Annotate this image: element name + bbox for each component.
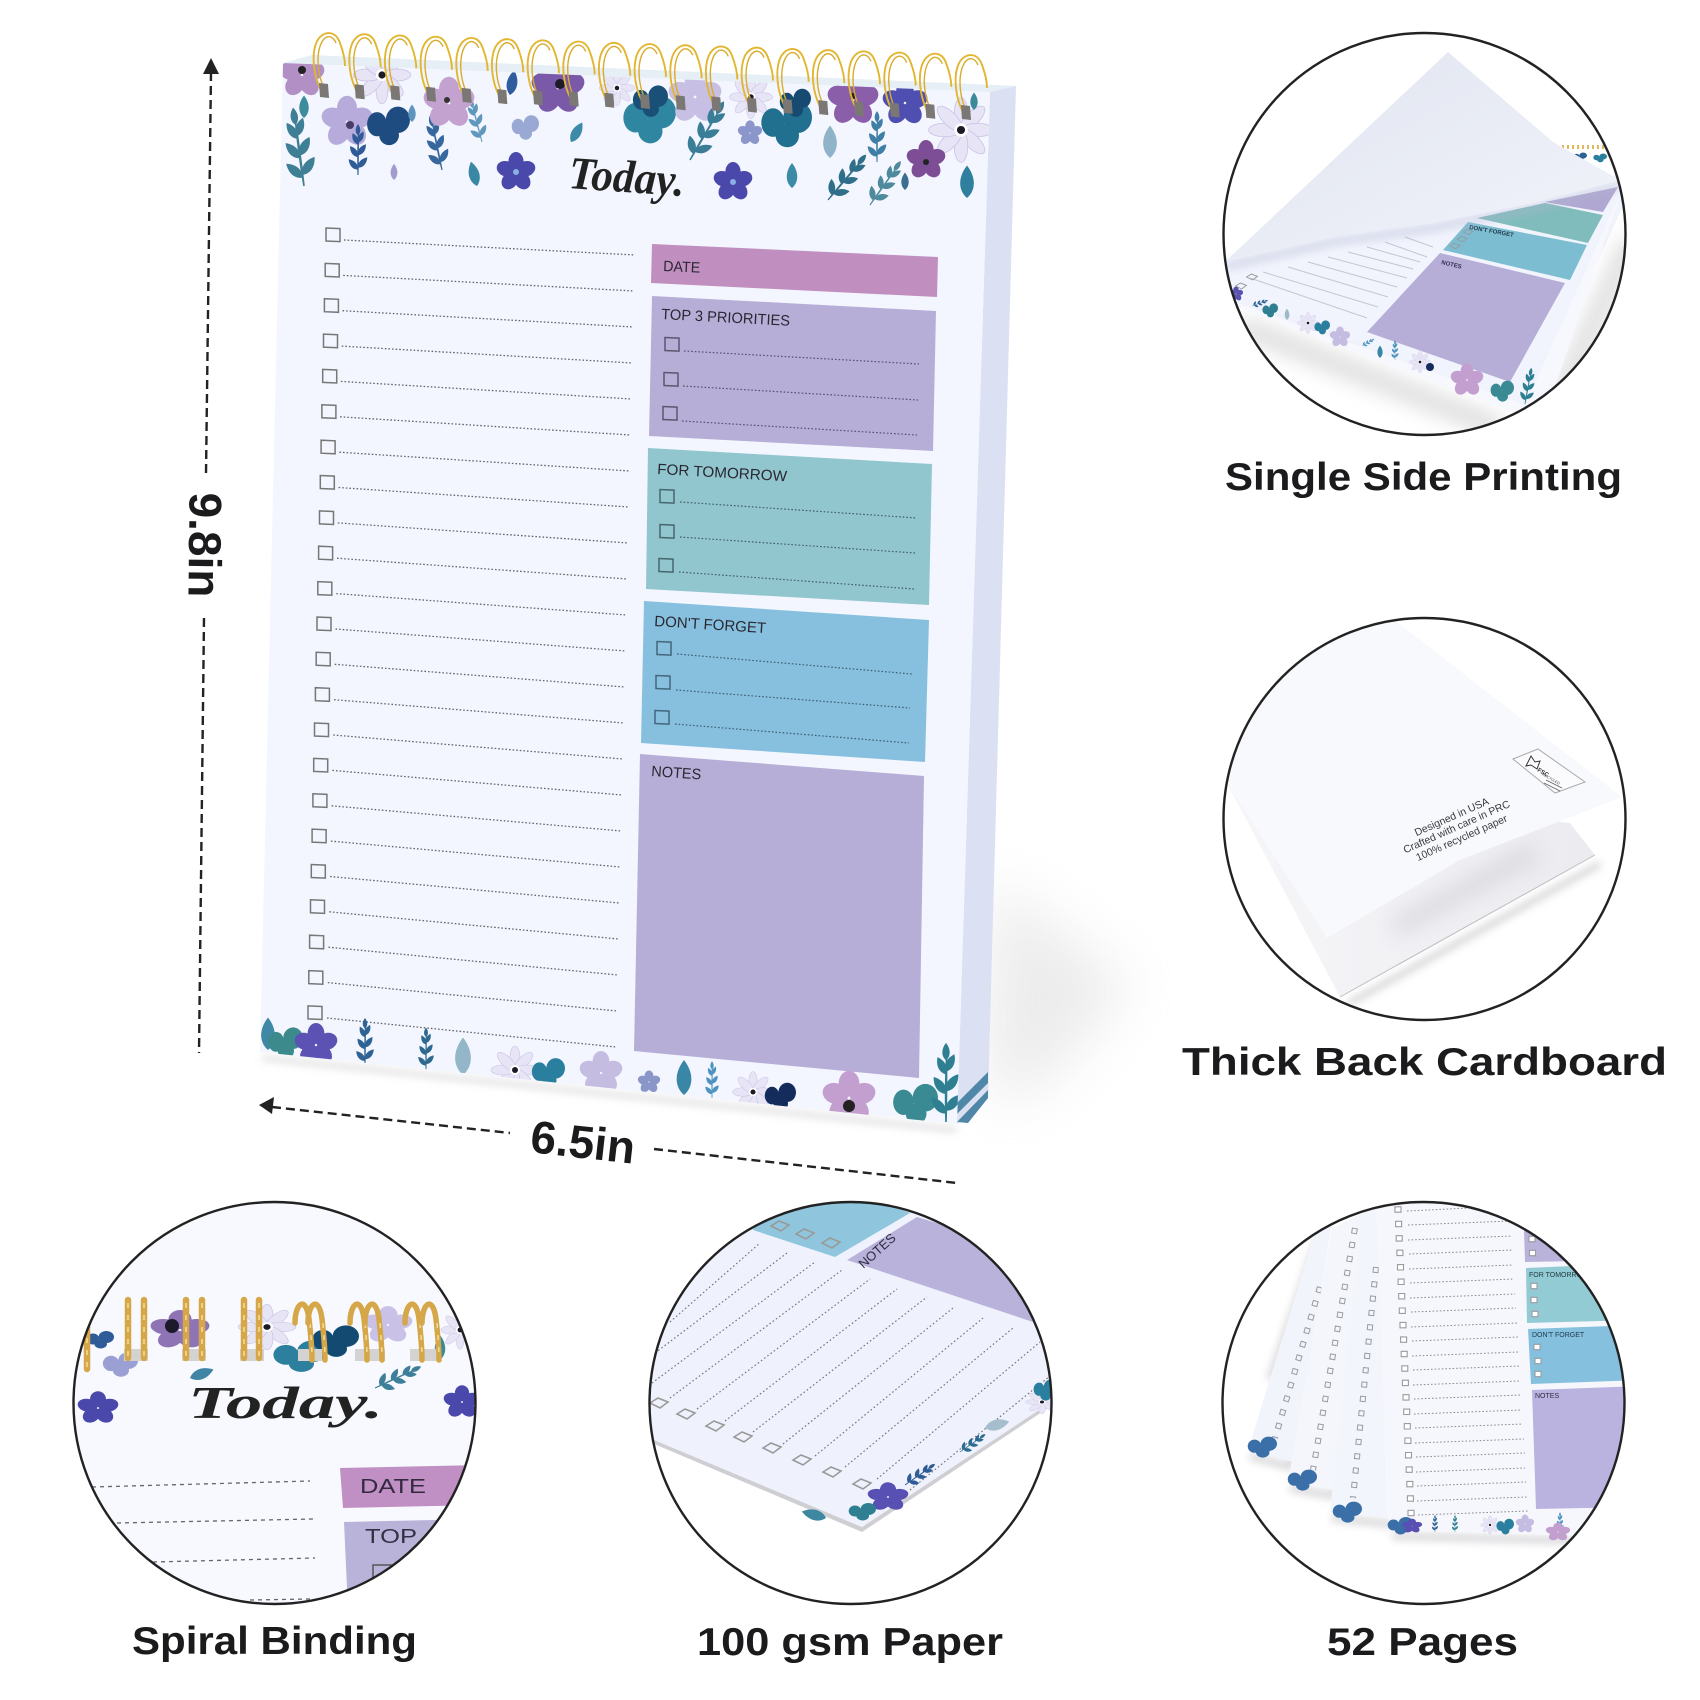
small distant spiral and flowers	[1562, 147, 1608, 162]
don't forget panel in perspective	[1443, 222, 1587, 280]
notes panel in perspective	[1367, 253, 1565, 382]
cover sheet	[1376, 804, 1558, 908]
bottom floral strip	[1228, 287, 1540, 405]
spiral binding	[314, 33, 987, 120]
panel: notes: NOTES	[651, 763, 702, 783]
caption: thick back cardboard: Thick Back Cardboard	[1182, 1041, 1667, 1084]
caption: 100 gsm paper: 100 gsm Paper	[697, 1621, 1003, 1664]
don't forget panel	[1528, 1325, 1640, 1384]
width dimension arrow: 6.5in	[528, 1110, 638, 1174]
panel: for tomorrow	[646, 448, 932, 605]
fan shadows	[1248, 1239, 1572, 1547]
printed back cover text: 100% recycled paper	[1414, 813, 1510, 864]
notes panel	[1532, 1386, 1640, 1509]
panel: notes	[634, 754, 924, 1078]
corner florals	[800, 1380, 1059, 1523]
panel: thick back cardboard	[1182, 590, 1667, 1084]
panel labels: NOTES	[1441, 260, 1462, 271]
back page B	[1288, 1213, 1362, 1491]
notes label: NOTES	[855, 1230, 899, 1271]
pad side and top edge	[283, 55, 1016, 1124]
panel: top 3 priorities	[649, 296, 936, 451]
caption: 52 pages: 52 Pages	[1327, 1621, 1518, 1664]
gold spiral rings	[87, 1300, 440, 1369]
date label	[340, 1465, 464, 1508]
date label: DATE	[360, 1476, 426, 1498]
top priorities panel in perspective	[1545, 187, 1618, 212]
panel labels	[1441, 225, 1514, 271]
curled page flap	[1227, 52, 1620, 260]
title: Today.: Today.	[567, 147, 687, 206]
for tomorrow panel: FOR TOMORROW	[1529, 1272, 1589, 1279]
planner page	[260, 63, 990, 1124]
pad shadow	[262, 880, 1130, 1130]
dotted lines	[652, 1243, 1050, 1490]
printed back cover text: Crafted with care in PRC	[1402, 798, 1512, 856]
printed back cover text: Designed in USA	[1413, 796, 1491, 839]
dashed writing lines	[92, 1481, 315, 1600]
notes panel	[847, 1217, 1033, 1322]
FSC certification label: FSC	[1536, 768, 1550, 779]
checkboxes	[650, 1221, 871, 1489]
blue panel	[753, 1203, 910, 1257]
panel: 100 gsm paper	[640, 1190, 1060, 1664]
floral footer	[261, 1018, 964, 1126]
front page list rows	[1395, 1206, 1528, 1516]
panel: don't forget: DON'T FORGET	[654, 613, 767, 637]
caption: single side printing: Single Side Printing	[1225, 456, 1622, 499]
page under flap	[1226, 176, 1622, 405]
bottom floral strip	[1388, 1512, 1571, 1542]
to-do list lines	[327, 240, 635, 1047]
top priorities label	[344, 1520, 436, 1589]
panel: top 3 priorities: TOP 3 PRIORITIES	[661, 306, 791, 330]
height dimension arrow	[178, 58, 232, 1053]
notes panel: NOTES	[1535, 1393, 1559, 1400]
panel: 52 pages	[1222, 1190, 1640, 1664]
front page	[1376, 1190, 1640, 1538]
back page A	[1248, 1223, 1332, 1462]
height dimension arrow: 9.8in	[178, 492, 232, 598]
flap shadow	[1227, 186, 1620, 266]
panel: date	[651, 244, 938, 297]
panel: date: DATE	[663, 258, 701, 277]
panel: single side printing	[1220, 33, 1640, 499]
enlarged title: Today.: Today.	[188, 1377, 383, 1428]
width dimension arrow	[259, 1097, 957, 1183]
panel: for tomorrow: FOR TOMORROW	[657, 461, 788, 485]
page in perspective	[650, 1210, 1049, 1527]
backing sheet	[1227, 783, 1595, 997]
floral band	[76, 1304, 482, 1425]
to-do list checkboxes	[308, 228, 340, 1020]
page thickness edge	[654, 1408, 1046, 1532]
priorities panel	[1524, 1226, 1640, 1262]
for tomorrow panel	[1526, 1263, 1640, 1323]
floral header	[282, 63, 989, 206]
panel: spiral binding	[70, 1200, 482, 1663]
FSC certification label: RECYCLED	[1542, 772, 1561, 786]
panel labels: DON'T FORGET	[1469, 225, 1514, 239]
don't forget panel: DON'T FORGET	[1532, 1332, 1585, 1339]
back page C	[1330, 1208, 1388, 1523]
planner notepad	[260, 46, 1016, 1126]
for tomorrow panel in perspective	[1477, 203, 1603, 243]
lines on page	[1250, 237, 1433, 318]
panel: don't forget	[641, 601, 929, 762]
caption: spiral binding: Spiral Binding	[132, 1620, 417, 1663]
FSC certification label	[1513, 749, 1585, 793]
top priorities label: TOP	[365, 1526, 417, 1548]
small checkboxes	[1236, 229, 1473, 289]
